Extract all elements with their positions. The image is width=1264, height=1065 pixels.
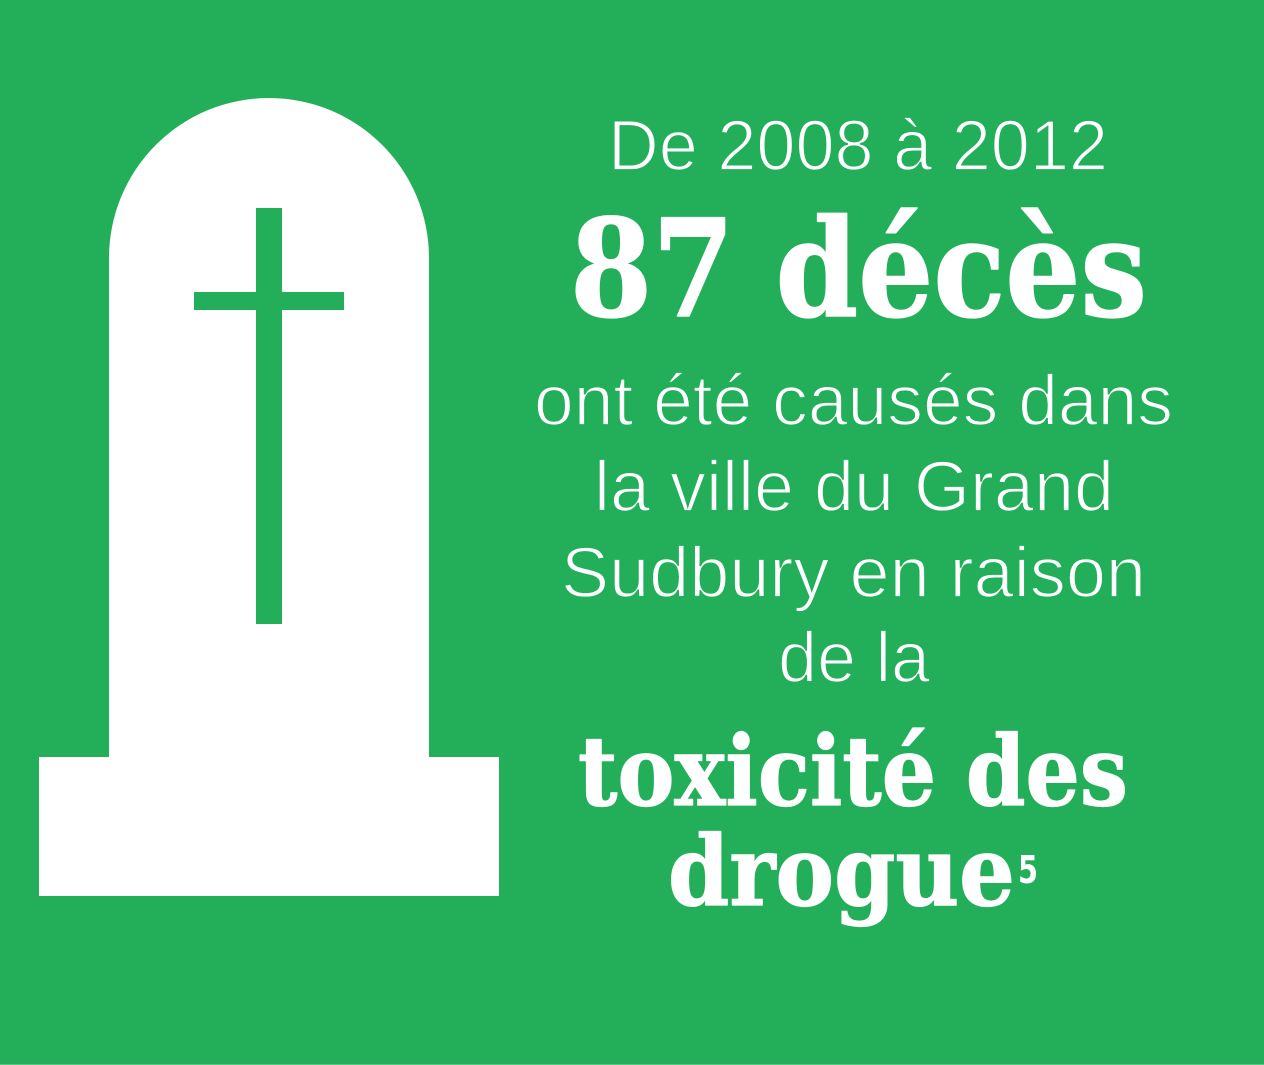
text: description line 2: la ville du Grand bbox=[594, 448, 1114, 527]
text block: statistic bbox=[534, 107, 1173, 928]
text: description line 1: ont été causés dans bbox=[534, 362, 1173, 441]
text: description line 3: Sudbury en raison bbox=[561, 534, 1146, 613]
heading: drug toxicity line 2: drogue bbox=[668, 815, 1015, 928]
footnote marker: 5 bbox=[1018, 848, 1038, 892]
text: description line 4: de la bbox=[778, 619, 930, 698]
heading: drug toxicity line 1: toxicité des bbox=[578, 715, 1128, 828]
icon: cross bbox=[194, 208, 344, 624]
heading: 87 deaths: 87 décès bbox=[570, 189, 1147, 348]
text: date range: De 2008 à 2012 bbox=[608, 107, 1108, 186]
icon: tombstone with cross bbox=[39, 98, 499, 896]
